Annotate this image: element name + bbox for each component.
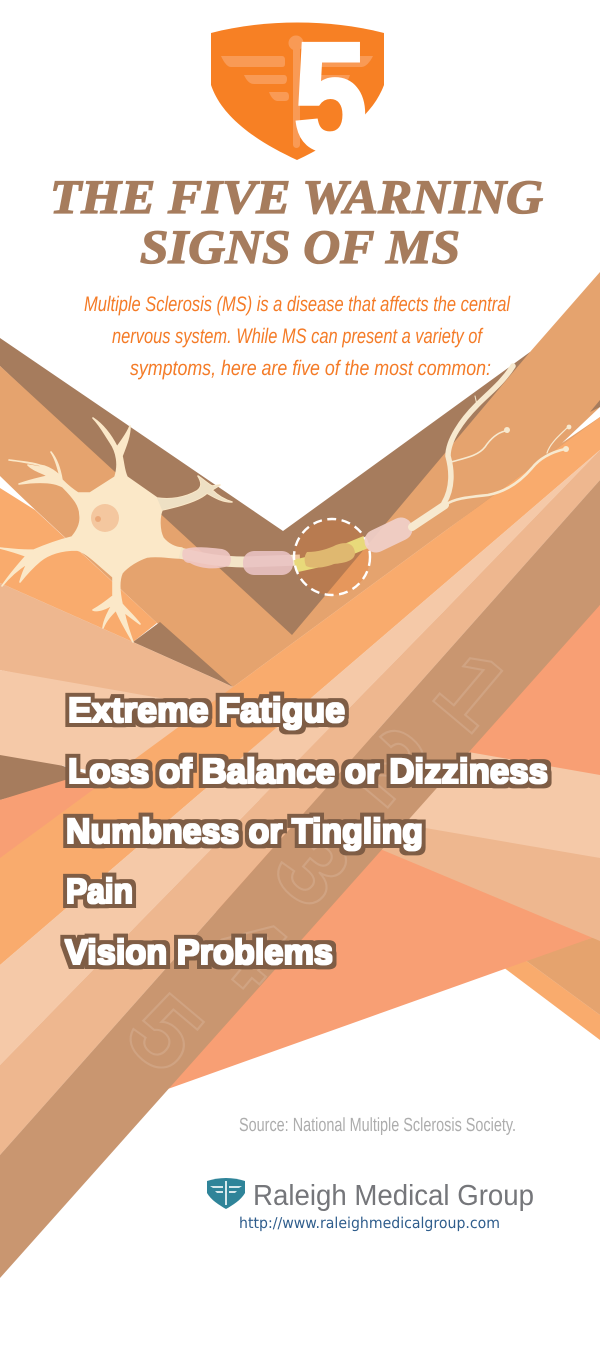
neuron illustration [0,366,571,642]
faint outlined band numerals: 2 [332,704,448,826]
title: THE FIVE WARNING [50,171,543,224]
sign 2: Loss of Balance or Dizziness [68,752,548,791]
big white numeral 5: 5 [294,12,367,182]
sign 3: Numbness or Tingling [66,812,423,851]
logo shield with number 5 [211,12,384,182]
myelin sheath segments left [182,547,293,575]
faint outlined band numerals: 5 [107,972,223,1094]
sign 5: Vision Problems [65,933,333,972]
sign 1: Extreme Fatigue [68,691,345,730]
footer logo: Raleigh Medical Group [207,1178,534,1232]
intro paragraph: nervous system. While MS can present a variety of [112,325,484,348]
neuron cell body and dendrites [0,418,232,642]
teal shield icon [207,1178,245,1209]
title: SIGNS OF MS [140,221,460,274]
myelin sheath segment right [376,529,401,541]
shaded dendrite over dark band [157,476,232,510]
intro paragraph: symptoms, here are five of the most common: [130,357,491,380]
orange shield [211,22,384,160]
faint outlined band numerals [107,629,531,1094]
title [50,171,543,274]
faint outlined band numerals: 4 [192,889,308,1011]
faint outlined band numerals: 1 [415,629,531,751]
background: angular colour bands [0,272,600,1278]
caduceus staff and wings [221,36,373,148]
website url: http://www.raleighmedicalgroup.com [239,1214,500,1232]
source note: Source: National Multiple Sclerosis Society. [239,1115,516,1136]
company name: Raleigh Medical Group [253,1180,534,1212]
intro paragraph [84,293,511,380]
sign 4: Pain [66,872,133,911]
list of five warning signs [65,691,548,972]
axon left section [180,553,300,562]
axon terminal branches [412,366,571,527]
cell nucleus [91,504,119,532]
faint outlined band numerals: 3 [255,807,371,929]
damaged segment inside dashed circle [294,519,370,595]
